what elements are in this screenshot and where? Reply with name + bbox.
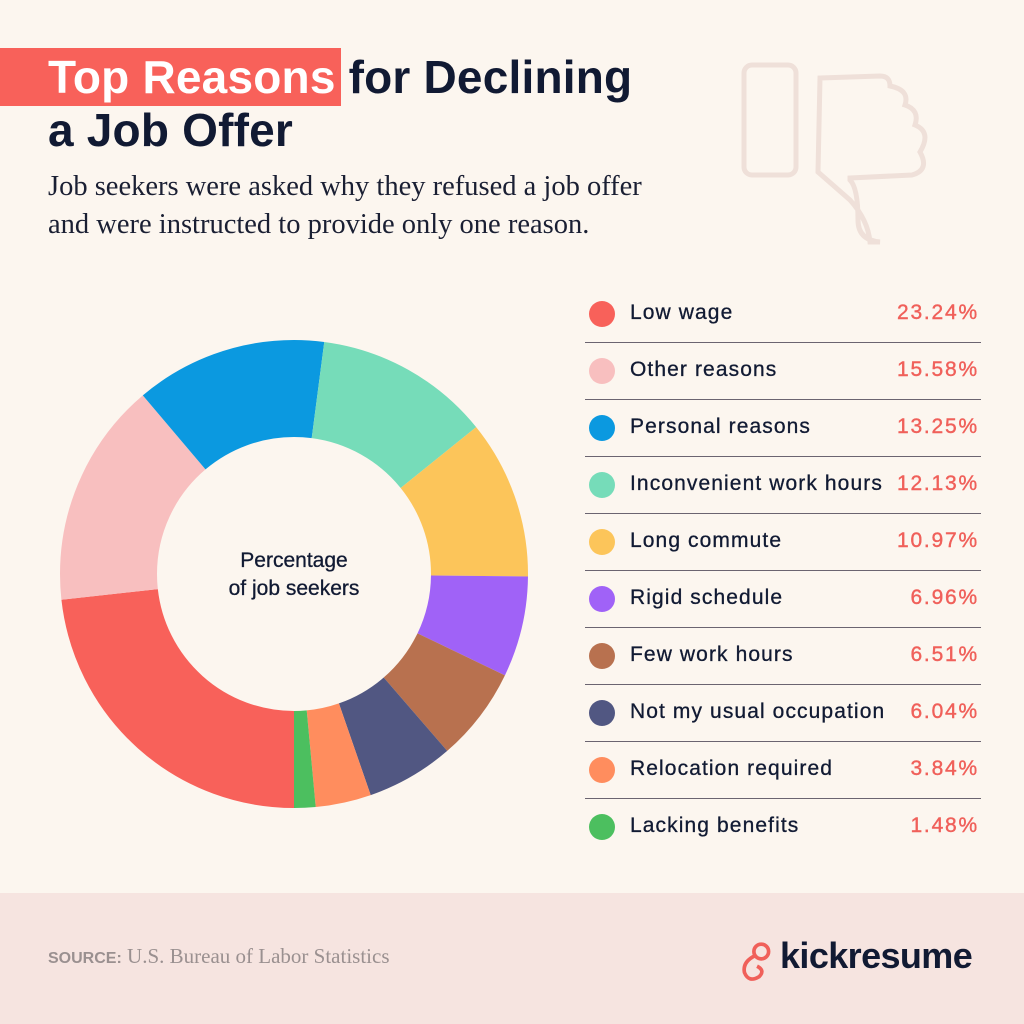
- legend: Few work hours: [630, 643, 794, 666]
- legend: Not my usual occupation: [630, 700, 885, 723]
- donut chart: of job seekers: [229, 577, 359, 600]
- legend: Long commute: [630, 529, 782, 552]
- title: a Job Offer: [48, 104, 293, 156]
- donut chart: [60, 340, 528, 808]
- legend: Inconvenient work hours: [630, 472, 883, 495]
- title highlight box: [0, 48, 341, 106]
- legend: 10.97%: [897, 529, 979, 552]
- logo: kickresume: [780, 935, 972, 976]
- subtitle: Job seekers were asked why they refused a job offer: [48, 171, 642, 202]
- footer: [0, 893, 1024, 1024]
- title: [48, 51, 632, 156]
- legend: 15.58%: [897, 358, 979, 381]
- legend: 23.24%: [897, 301, 979, 324]
- icon: thumbs down: [742, 62, 928, 244]
- legend: 13.25%: [897, 415, 979, 438]
- legend: Rigid schedule: [630, 586, 783, 609]
- legend: 1.48%: [910, 814, 979, 837]
- legend: Personal reasons: [630, 415, 811, 438]
- legend: Relocation required: [630, 757, 833, 780]
- legend: 6.04%: [910, 700, 979, 723]
- title: Top Reasons for Declining: [48, 51, 632, 103]
- subtitle: [48, 171, 642, 240]
- legend: Lacking benefits: [630, 814, 799, 837]
- legend: Other reasons: [630, 358, 777, 381]
- donut center label: Percentage: [240, 549, 348, 572]
- legend: 6.96%: [910, 586, 979, 609]
- source: SOURCE: U.S. Bureau of Labor Statistics: [48, 944, 390, 968]
- legend: Low wage: [630, 301, 733, 324]
- legend: 3.84%: [910, 757, 979, 780]
- legend: 12.13%: [897, 472, 979, 495]
- subtitle: and were instructed to provide only one reason.: [48, 209, 589, 240]
- legend: 6.51%: [910, 643, 979, 666]
